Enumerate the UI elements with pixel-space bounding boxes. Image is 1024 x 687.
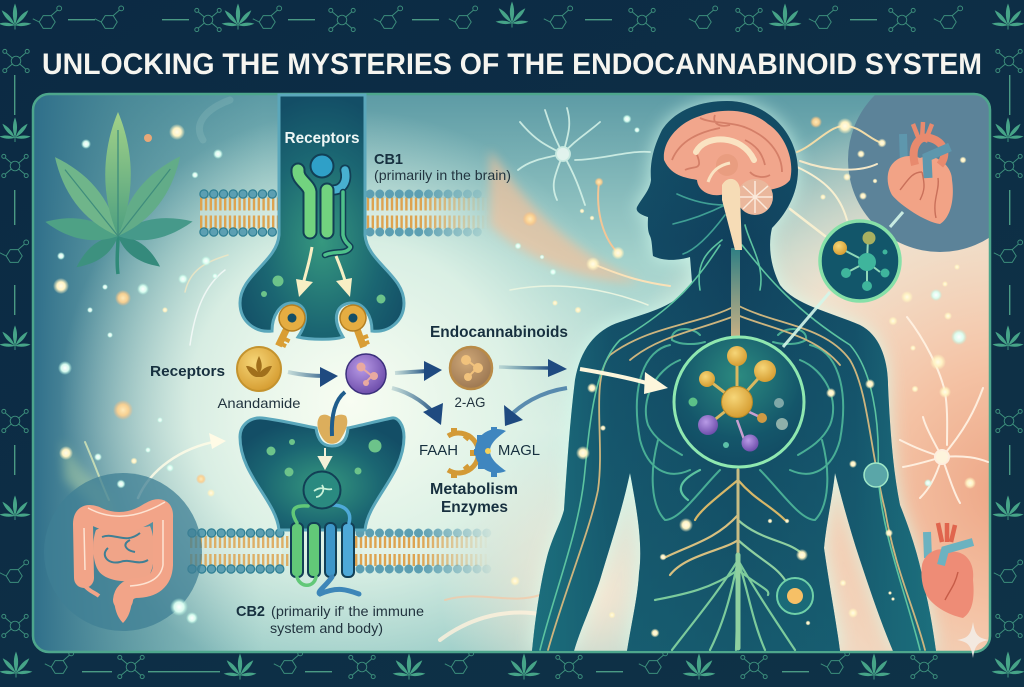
top right dark circle	[848, 95, 989, 252]
ribs and nerves	[540, 194, 925, 650]
label: CB2: system and body)	[270, 620, 383, 636]
neuron: lower right	[900, 317, 988, 503]
bottom cell membrane	[190, 533, 495, 569]
border pattern: top row	[0, 2, 1024, 32]
green ribbon at lower left	[58, 444, 100, 502]
glowing particles	[53, 114, 976, 638]
binding key	[317, 415, 347, 444]
label: CB2: (primarily if' the immune	[271, 603, 424, 619]
MAGL enzyme gear	[474, 427, 506, 477]
anandamide coin	[237, 347, 281, 391]
label: Endocannabinoids: Endocannabinoids	[430, 324, 568, 341]
arrow: to body network	[580, 369, 668, 394]
CB2 loops	[293, 505, 359, 594]
peach light ribbon	[490, 150, 640, 282]
keys	[267, 301, 376, 352]
label: Metabolism Enzymes	[430, 481, 518, 516]
neuron: upper left of body	[518, 108, 650, 205]
signal arrows	[296, 247, 352, 297]
CB1 receptor protein	[298, 154, 350, 255]
arrow: 2-AG to body	[499, 359, 567, 377]
intestines circle	[44, 473, 202, 631]
label: CB1: (primarily in the brain)	[374, 167, 511, 183]
2-AG coin	[450, 347, 492, 389]
upper right molecule circle	[783, 212, 903, 347]
human silhouette	[532, 101, 936, 651]
heart top right	[888, 122, 953, 224]
border pattern: left column	[0, 49, 31, 638]
label: Receptors (inside synapse): Receptors	[284, 130, 360, 147]
border pattern: right column	[992, 49, 1024, 638]
FAAH enzyme gear	[448, 428, 479, 478]
flowing ribbons and light lines	[85, 100, 882, 640]
label: 2-AG: 2-AG	[454, 394, 486, 410]
head nerves	[673, 194, 725, 254]
body nodes	[777, 463, 888, 614]
label: CB1: CB1	[374, 151, 403, 168]
border pattern: bottom row	[0, 651, 1024, 680]
spinal cord	[731, 248, 740, 648]
label: Anandamide: Anandamide	[218, 395, 301, 411]
label: FAAH: FAAH	[419, 443, 458, 459]
arrow: MAGL inflow	[504, 388, 567, 426]
upper synapse terminal with CB1 receptor	[240, 95, 404, 339]
lower synapse terminal with CB2 receptor	[240, 392, 404, 594]
purple molecule	[346, 354, 386, 394]
arrow: purple molecule to CB2 site	[332, 392, 345, 436]
label: Metabolism Enzymes: Metabolism	[430, 481, 518, 498]
sparkle star	[957, 622, 989, 658]
arrow: anandamide to purple molecule	[288, 367, 338, 387]
tan nerves	[548, 305, 925, 650]
panel border	[33, 94, 990, 652]
lower nerve tree	[655, 470, 800, 650]
head halo	[532, 101, 936, 651]
label: CB2: CB2	[236, 603, 265, 620]
title: UNLOCKING THE MYSTERIES OF THE ENDOCANNABINOID SYSTEM	[42, 48, 982, 81]
receptor head	[304, 472, 340, 508]
central molecular network	[674, 337, 804, 467]
label: Metabolism Enzymes: Enzymes	[441, 499, 508, 516]
top cell membrane	[200, 194, 490, 232]
vesicles	[266, 439, 382, 476]
label: CB2	[236, 603, 424, 636]
heart bottom right	[921, 523, 974, 618]
brain	[664, 111, 791, 250]
down arrow	[319, 448, 331, 468]
rib cage	[637, 329, 843, 520]
label: Receptors: Receptors	[150, 363, 225, 380]
vesicles	[261, 276, 386, 304]
arrow: purple molecule to 2-AG	[395, 361, 442, 381]
cannabis leaf	[43, 112, 194, 274]
arrow: purple molecule to FAAH	[392, 388, 443, 425]
label: MAGL: MAGL	[498, 443, 540, 459]
CB2 helices	[291, 523, 354, 577]
label: CB1	[374, 151, 511, 183]
green limb nerves	[540, 225, 920, 650]
